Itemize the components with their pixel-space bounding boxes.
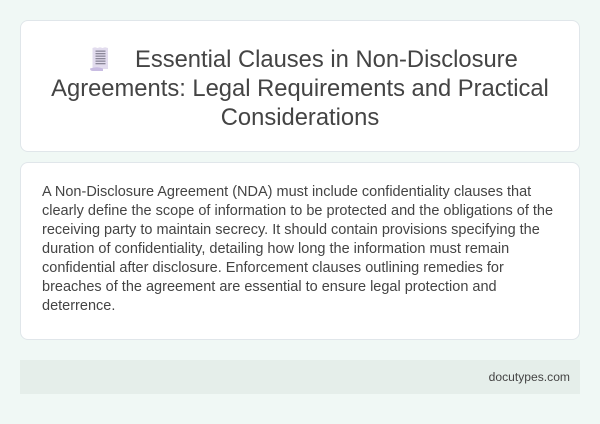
footer text: docutypes.com xyxy=(489,370,570,384)
icon: document xyxy=(90,47,108,71)
text block: description: confidential after disclosure. Enforcement clauses outlining remedies for xyxy=(42,260,504,276)
text block: description: breaches of the agreement are essential to ensure legal protection and xyxy=(42,279,497,295)
text block: description: clearly define the scope of information to be protected and the obligations of the xyxy=(42,203,553,219)
title: Agreements: Legal Requirements and Practical xyxy=(51,75,549,102)
text block: description: deterrence. xyxy=(42,298,115,314)
title: Considerations xyxy=(221,104,379,131)
title: Essential Clauses in Non-Disclosure xyxy=(135,46,518,73)
title xyxy=(51,46,549,131)
panel: title card xyxy=(20,20,580,152)
panel: description card xyxy=(20,162,580,340)
footer bar xyxy=(20,360,580,394)
text block: description: A Non-Disclosure Agreement (NDA) must include confidentiality clauses that xyxy=(42,184,531,200)
text block: description: duration of confidentiality, detailing how long the information must remain xyxy=(42,241,509,257)
text block: description: receiving party to maintain secrecy. It should contain provisions specifying the xyxy=(42,222,540,238)
text block: description xyxy=(42,184,553,314)
